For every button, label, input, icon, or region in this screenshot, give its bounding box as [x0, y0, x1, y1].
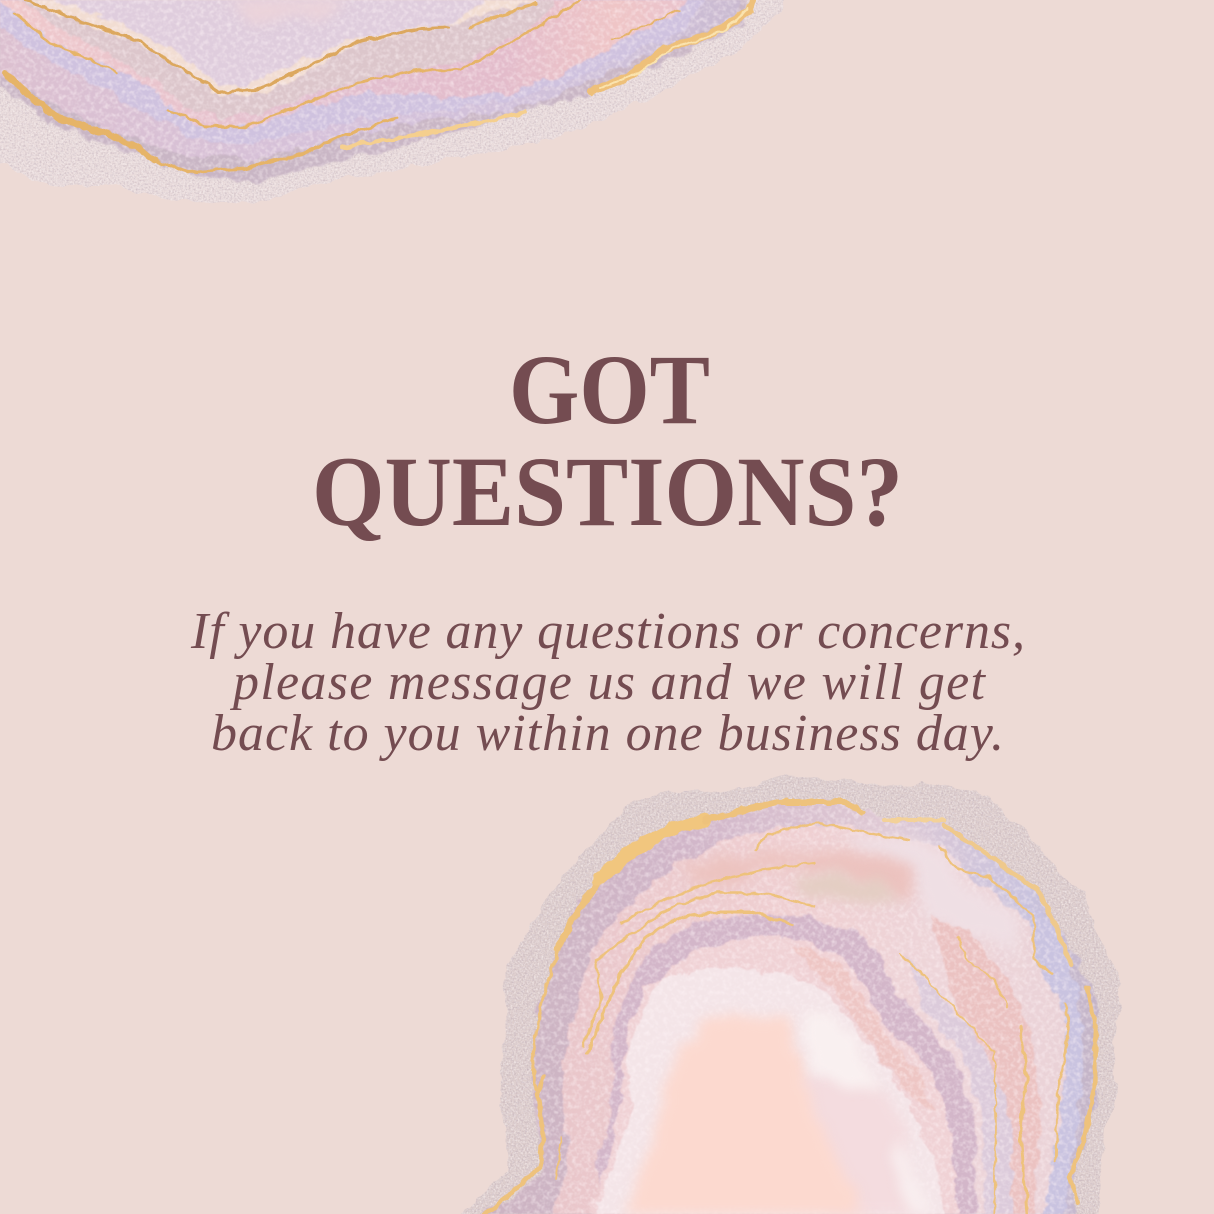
salmon patch	[680, 850, 915, 905]
white highlight lower	[890, 1135, 930, 1214]
lavender streak, right side	[1028, 905, 1084, 1214]
grey rose band	[0, 0, 571, 117]
salmon inner streak	[790, 945, 935, 1110]
agate: top left corner	[0, 0, 786, 203]
agate: bottom right	[440, 775, 1121, 1214]
lavender centre	[56, 0, 530, 85]
pale pink inner band	[585, 937, 962, 1214]
mauve and lavender band	[470, 802, 1096, 1214]
title line 2: QUESTIONS?	[312, 436, 903, 547]
body line 1: If you have any questions or concerns,	[190, 603, 1025, 660]
title	[312, 334, 903, 547]
mauve inner band	[596, 915, 980, 1214]
mauve grey band	[0, 0, 755, 182]
pink band	[545, 825, 1065, 1214]
salmon band right	[930, 915, 1040, 1214]
white upper right patch	[840, 835, 1020, 950]
white highlights	[805, 1010, 880, 1090]
body text	[190, 603, 1025, 762]
lavender band	[0, 0, 725, 143]
lilac band right	[905, 955, 1012, 1214]
white inner band	[590, 967, 945, 1214]
pink band	[0, 0, 700, 127]
pale pink right of core	[797, 1075, 925, 1214]
gold veins	[485, 802, 1096, 1214]
title line 1: GOT	[509, 334, 710, 445]
body line 3: back to you within one business day.	[211, 705, 1004, 762]
outer speckled rim	[0, 0, 786, 203]
beige patch	[800, 872, 900, 905]
peach core	[612, 1015, 875, 1214]
pink centre	[190, 0, 390, 24]
body line 2: please message us and we will get	[229, 654, 987, 711]
rose and lavender band	[0, 0, 750, 160]
cream band	[26, 0, 545, 96]
outer speckled rim	[440, 775, 1121, 1214]
gold veins	[5, 0, 755, 172]
